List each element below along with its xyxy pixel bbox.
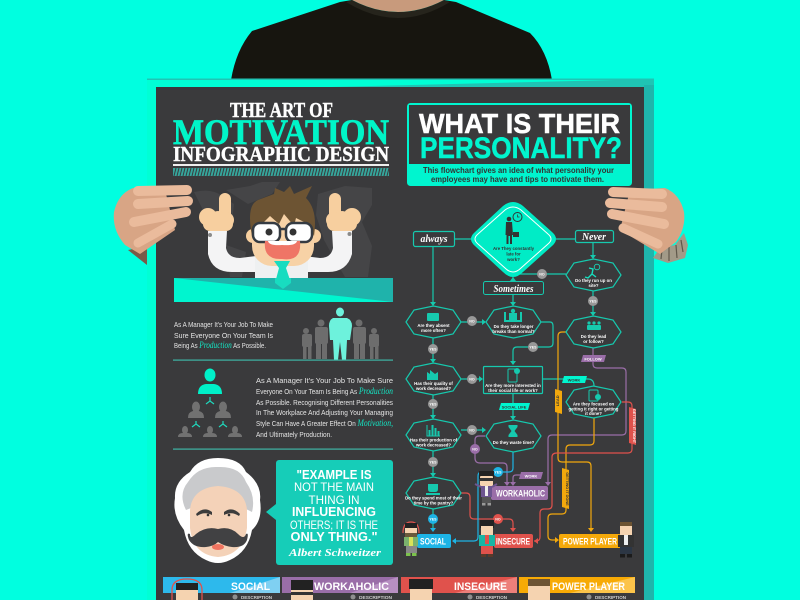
decision: social life or work <box>484 366 542 394</box>
left hand <box>114 188 188 265</box>
label: never: Never <box>581 232 606 243</box>
text block: manager intro: Being As Production As Possible. <box>174 340 266 350</box>
footer card: insecure <box>401 577 517 600</box>
callout: quote: ONLY THING." <box>290 530 378 544</box>
character: social <box>403 522 419 556</box>
callout: quote: OTHERS; IT IS THE <box>290 518 378 532</box>
shirt <box>255 257 308 278</box>
pills: yes / no: NO <box>469 319 475 323</box>
result: insecure: INSECURE <box>496 536 530 546</box>
character: excited manager <box>199 186 361 289</box>
callout: quote: INFLUENCING <box>292 505 376 519</box>
flowchart connectors <box>430 239 632 544</box>
decision: run up on site <box>566 259 621 291</box>
label: sometimes: Sometimes <box>494 284 534 295</box>
glasses <box>253 223 312 242</box>
decision: social life or work: their social life or work? <box>488 388 538 393</box>
decision: waste time <box>486 420 541 452</box>
decision: lead or follow <box>566 316 621 348</box>
connector tags: WORK <box>525 474 537 478</box>
panel: what is their personality: PERSONALITY? <box>420 132 622 165</box>
label: sometimes <box>484 282 544 295</box>
pills: yes / no: YES <box>529 345 537 349</box>
pills: yes / no: YES <box>494 470 502 474</box>
decision: run up on site: Do they run up on <box>575 278 612 283</box>
left hand <box>199 193 234 231</box>
mouth <box>265 241 300 259</box>
decision: absent more often <box>406 306 461 338</box>
decision: late for work: Are They constantly <box>493 246 535 251</box>
footer card: social: SOCIAL <box>231 581 270 593</box>
decision: absent more often: more often? <box>421 328 446 333</box>
pills: yes / no: NO <box>469 377 475 381</box>
text block: recognising personalities: And Ultimately Production. <box>256 430 332 439</box>
footer card: workaholic: DESCRIPTION <box>359 595 392 600</box>
title: the art of motivation: THE ART OF <box>230 98 333 122</box>
right hand with watch <box>610 188 688 263</box>
decision: absent more often: Are they absent <box>417 323 450 328</box>
right hand <box>326 193 361 231</box>
text block: recognising personalities: Everyone On Your Team Is Being As Production <box>256 386 393 396</box>
connector tags: WORK <box>568 378 580 382</box>
pills: yes / no: NO <box>469 428 475 432</box>
text block: recognising personalities: As A Manager It's Your Job To Make Sure <box>256 376 393 385</box>
hair <box>250 186 315 236</box>
divider <box>173 360 393 361</box>
text block: recognising personalities <box>256 376 393 439</box>
connector tags: FOLLOW <box>584 356 602 362</box>
footer card: workaholic: WORKAHOLIC <box>314 581 389 593</box>
callout: quote: NOT THE MAIN <box>294 480 374 494</box>
text block: manager intro: As A Manager It's Your Job To Make <box>174 320 273 329</box>
text block: recognising personalities: Style Can Have A Greater Effect On Motivation, <box>256 418 393 428</box>
decision: production of work: Has their production of <box>410 438 458 442</box>
text block: manager intro: Sure Everyone On Your Team Is <box>174 331 273 340</box>
footer card: power player: POWER PLAYER <box>552 581 625 593</box>
panel: what is their personality: This flowchart gives an idea of what personality your <box>423 166 614 175</box>
decision: getting it right or done: getting it right or getting <box>569 406 619 412</box>
decision: getting it right or done: Are they focused on <box>573 402 615 406</box>
decision: getting it right or done: it done? <box>585 411 602 416</box>
label: never <box>576 230 614 243</box>
decision: time by the pantry: time by the pantry? <box>414 500 454 506</box>
connector tags: LEAD <box>555 395 560 406</box>
callout: quote: Albert Schweitzer <box>288 547 382 559</box>
decision: social life or work: Are they more interested in <box>485 383 541 388</box>
divider <box>173 448 393 450</box>
pills: yes / no: YES <box>429 517 437 521</box>
panel: what is their personality: employees may have and tips to motivate them. <box>431 175 604 184</box>
decision: lead or follow: or follow? <box>583 339 604 344</box>
character: insecure <box>479 520 495 557</box>
decision: getting it right or done <box>566 386 621 418</box>
decision: late for work: late for <box>506 252 521 256</box>
world map backdrop <box>194 182 372 277</box>
panel: what is their personality <box>408 104 632 186</box>
decision: waste time: Do they waste time? <box>493 440 535 445</box>
pills: yes / no: NO <box>472 447 478 451</box>
decision: production of work: work decreased? <box>415 442 451 448</box>
footer card: social: DESCRIPTION <box>241 595 272 600</box>
decision: longer breaks: breaks than normal? <box>492 329 535 334</box>
decision: time by the pantry: Do they spend most of their <box>405 496 462 500</box>
label: always: always <box>420 234 448 245</box>
panel: what is their personality: WHAT IS THEIR <box>419 108 620 139</box>
title: the art of motivation <box>173 98 389 176</box>
decision: quality of work <box>406 363 461 395</box>
result: social <box>417 534 451 548</box>
decision: longer breaks: Do they take longer <box>494 324 534 329</box>
character: power player <box>618 522 634 558</box>
pills: yes / no: NO <box>495 517 501 521</box>
result: workaholic: WORKAHOLIC <box>496 488 545 498</box>
result: power player <box>559 534 621 548</box>
result: insecure <box>494 534 533 548</box>
footer card: insecure: DESCRIPTION <box>476 595 507 600</box>
connector tags <box>499 355 636 509</box>
person torso <box>231 0 552 80</box>
decision: quality of work: work decreased? <box>415 386 451 391</box>
callout: quote: "EXAMPLE IS <box>296 468 372 482</box>
footer card: power player: DESCRIPTION <box>595 595 626 600</box>
label: always <box>414 232 454 246</box>
pills: yes / no: NO <box>539 272 545 276</box>
icon: albert schweitzer portrait <box>174 458 261 563</box>
footer card: power player <box>519 577 635 600</box>
result: workaholic <box>491 486 548 500</box>
callout: quote: THING IN <box>308 493 360 507</box>
decision: production of work <box>406 419 461 451</box>
pills: yes / no: YES <box>429 347 437 351</box>
decision: lead or follow: Do they lead <box>581 334 607 339</box>
decision: longer breaks <box>486 306 541 338</box>
callout: quote <box>266 460 393 565</box>
connector tags: GETTING IT DONE <box>565 472 569 506</box>
footer card: social <box>163 577 280 600</box>
icon: organisation hierarchy <box>178 368 242 437</box>
title: the art of motivation: INFOGRAPHIC DESIGN <box>173 142 389 166</box>
title: the art of motivation: MOTIVATION <box>173 112 389 152</box>
footer card: insecure: INSECURE <box>454 581 507 593</box>
footer card: workaholic <box>282 577 398 600</box>
poster <box>147 78 654 600</box>
character: workaholic <box>475 471 497 506</box>
text block: recognising personalities: In The Workplace And Adjusting Your Managing <box>256 408 393 417</box>
pills: yes / no: YES <box>429 402 437 406</box>
arms <box>208 231 258 272</box>
pills: yes / no: YES <box>429 460 437 464</box>
teal banner <box>174 278 393 302</box>
result: social: SOCIAL <box>420 536 446 546</box>
text block: recognising personalities: As Possible. Recognising Different Personalities <box>256 398 393 407</box>
icon: team silhouettes <box>302 308 379 360</box>
decision: late for work <box>471 202 556 277</box>
pills: yes / no: YES <box>589 299 597 303</box>
tie <box>274 261 291 289</box>
decision: time by the pantry <box>405 477 462 509</box>
pills: yes / no <box>428 269 598 524</box>
connector tags: GETTING IT RIGHT <box>632 409 636 444</box>
decision: run up on site: site? <box>588 283 599 288</box>
result: power player: POWER PLAYER <box>563 536 617 546</box>
connector tags: SOCIAL LIFE <box>502 404 527 410</box>
head <box>246 229 260 243</box>
text block: manager intro <box>174 320 273 350</box>
decision: quality of work: Has their quality of <box>414 381 453 386</box>
decision: late for work: work? <box>506 257 520 262</box>
